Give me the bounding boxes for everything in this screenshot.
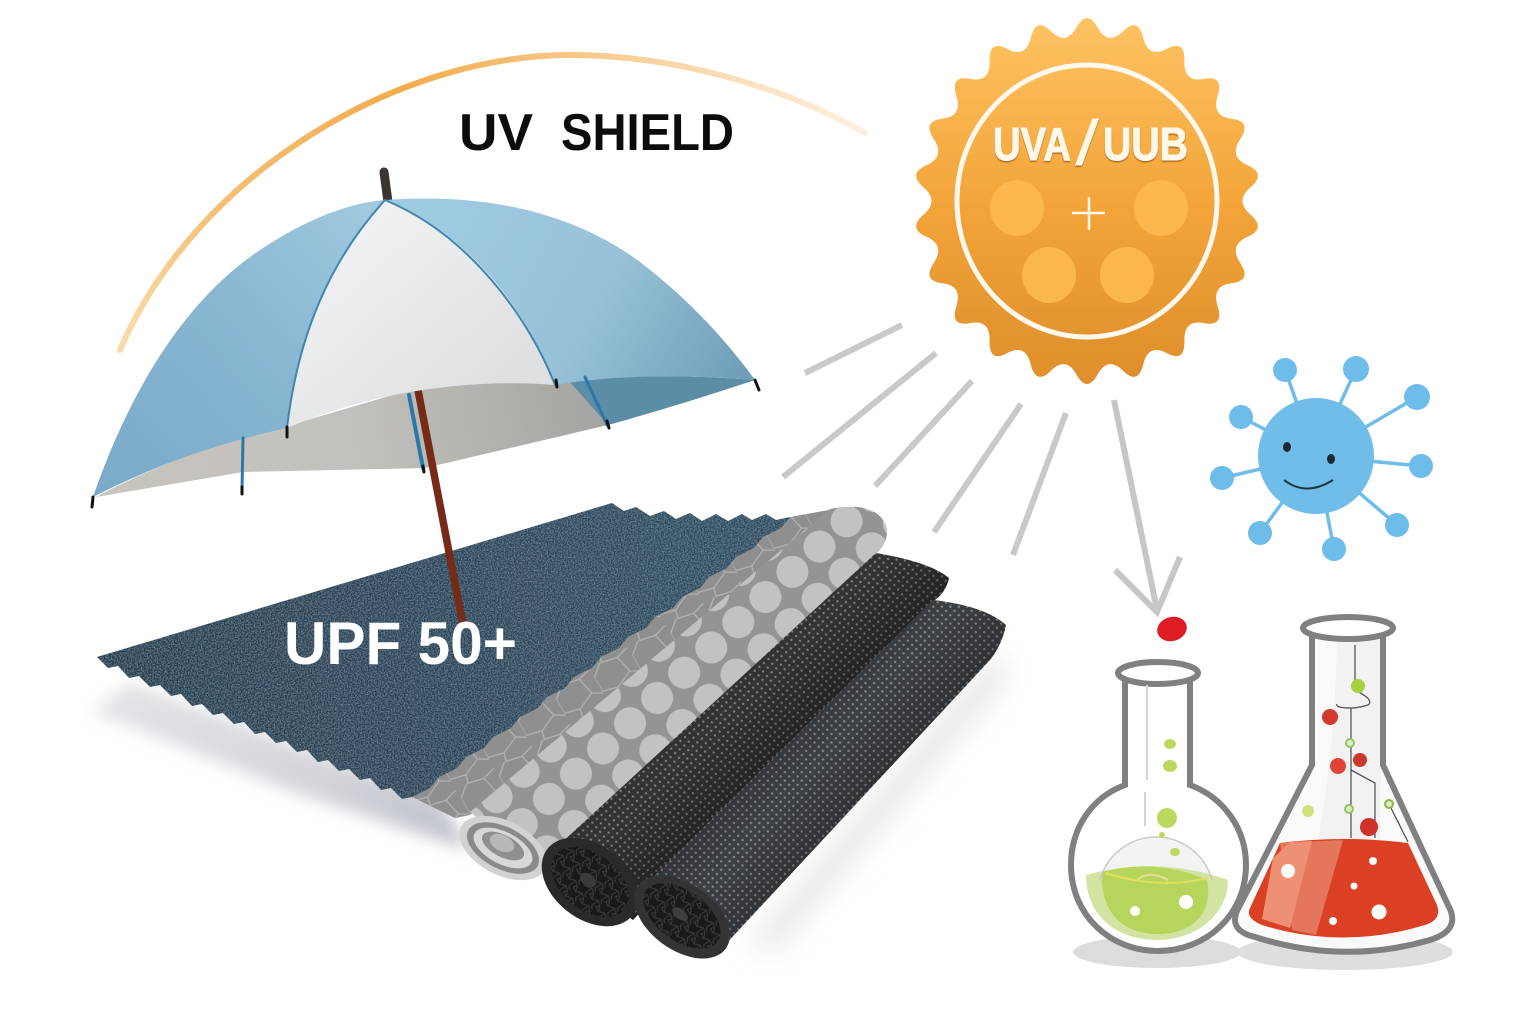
inner glass lines <box>1145 685 1147 826</box>
flask shadows <box>1073 934 1453 970</box>
molecule nodes <box>1302 679 1393 836</box>
right blue panel <box>385 199 755 385</box>
inner ring <box>957 65 1217 337</box>
dark roll <box>525 553 949 944</box>
label: UPF 50+: UPF 50+ <box>284 610 517 677</box>
shield arc <box>120 55 865 350</box>
spike tips <box>1210 356 1433 561</box>
liquid highlights <box>1280 840 1343 935</box>
grey coin-pattern roll <box>449 507 887 893</box>
sun badge <box>916 18 1258 384</box>
umbrella <box>92 172 759 620</box>
charcoal roll <box>619 600 1006 975</box>
ground shadow <box>92 650 1005 950</box>
conical flask rim <box>1303 617 1393 639</box>
left blue panel <box>93 200 385 497</box>
canopy underside <box>96 376 755 497</box>
top ferrule <box>384 172 388 202</box>
UV rays <box>783 325 1066 555</box>
white bubbles <box>1281 857 1386 925</box>
heading: UV SHIELD: UV <box>459 104 533 162</box>
heading: UV SHIELD: SHIELD <box>561 104 734 162</box>
white bubbles <box>1130 895 1193 916</box>
conical flask <box>1235 617 1452 952</box>
red liquid <box>1249 839 1438 938</box>
round flask outline <box>1071 680 1246 951</box>
molecule lines <box>1337 645 1408 842</box>
circles <box>990 180 1188 303</box>
spikes <box>1222 369 1421 549</box>
underside dark right section <box>570 376 755 425</box>
green liquid <box>1086 866 1228 940</box>
virus body <box>1258 398 1374 514</box>
blue fabric sheet <box>97 503 790 799</box>
ribs <box>92 200 759 507</box>
round flask <box>1070 662 1246 953</box>
round flask glass <box>1070 777 1246 953</box>
plus sign <box>1072 197 1105 230</box>
flasks <box>1070 617 1453 970</box>
badge text: UUB <box>1103 118 1188 170</box>
white centre panel <box>287 200 555 428</box>
fabric group <box>92 503 1006 975</box>
red drop <box>1154 614 1190 644</box>
badge text: UVA <box>993 118 1071 170</box>
badge text: / <box>1075 107 1099 179</box>
heading: UV SHIELD <box>459 104 734 162</box>
conical flask outline <box>1235 635 1452 952</box>
grey patterned sheet <box>412 508 840 818</box>
handle <box>418 390 462 620</box>
arrow to flasks <box>1114 400 1180 612</box>
virus icon <box>1210 356 1433 561</box>
green bubbles <box>1157 739 1180 856</box>
round flask rim <box>1118 662 1198 684</box>
virus face <box>1283 442 1335 488</box>
conical flask glass <box>1235 635 1452 952</box>
sun starburst <box>916 18 1258 384</box>
badge text <box>993 107 1188 179</box>
